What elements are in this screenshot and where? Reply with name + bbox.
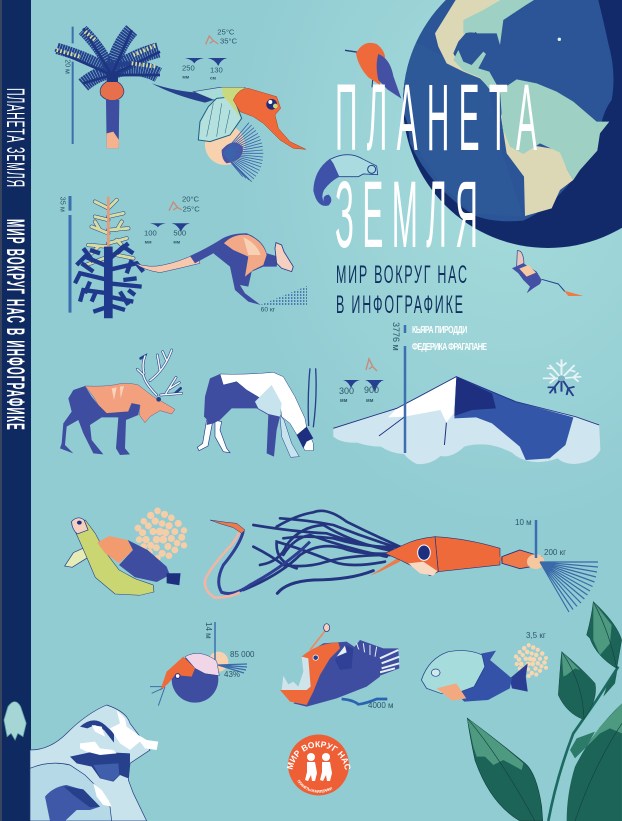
nautilus data: 43% (224, 670, 240, 679)
authors (412, 324, 487, 352)
long tail (152, 83, 213, 103)
climate data: temperature and rainfall, kangaroo (144, 195, 200, 244)
tentacles (150, 687, 165, 706)
continent: north america teal (463, 0, 537, 45)
front wave (30, 763, 112, 821)
araucaria tree with height scale: 35 м (59, 197, 68, 212)
tail (167, 573, 181, 585)
antlers (137, 350, 182, 395)
subtitle (336, 261, 467, 319)
squid size data: 10 м (515, 518, 532, 527)
depth wave (342, 699, 387, 704)
radial tail fan (223, 123, 263, 182)
icon: snowflake (543, 359, 581, 396)
spine title: ПЛАНЕТА ЗЕМЛЯ (0, 88, 28, 187)
piranha (421, 651, 528, 702)
foam (80, 710, 158, 755)
side fin (335, 645, 353, 670)
eye (313, 655, 318, 660)
eye (418, 545, 430, 560)
continent: south america teal (500, 79, 609, 180)
bottom tentacle (277, 571, 373, 593)
araucaria tree with height scale (59, 196, 143, 318)
body blue (190, 233, 278, 305)
belly peach (436, 683, 466, 701)
dark slope (454, 377, 496, 416)
climate data: mountain: мм (366, 398, 374, 404)
belly light (255, 385, 282, 417)
climate data: temperature and rainfall, rainforest: 35°C (220, 37, 238, 46)
authors: КЬЯРА ПИРОДДИ (412, 324, 467, 335)
peach circle (208, 652, 228, 672)
continent: central america teal (454, 50, 497, 89)
climate data: mountain (339, 359, 384, 404)
squid size data: 200 кг (544, 548, 566, 557)
icon: chameleon (313, 155, 378, 206)
subtitle: МИР ВОКРУГ НАС (336, 261, 467, 289)
orange head (160, 657, 195, 691)
climate data: temperature and rainfall, kangaroo: 20°C (182, 195, 200, 204)
front leg light (280, 415, 299, 457)
kangaroo (135, 233, 293, 314)
eye (175, 674, 180, 678)
pink shell top (185, 653, 219, 676)
tentacle tip (210, 520, 245, 533)
palm tree with height scale (55, 27, 160, 148)
front foam (93, 783, 112, 807)
body orange (280, 642, 340, 705)
authors: ФЕДЕРИКА ФРАГАПАНЕ (412, 341, 487, 352)
climate data: temperature and rainfall, rainforest: 250 (182, 64, 195, 73)
climate data: temperature and rainfall, kangaroo: 500 (173, 228, 186, 237)
orange head and body (233, 88, 306, 149)
globe (400, 0, 622, 248)
spine subtitle: МИР ВОКРУГ НАС В ИНФОГРАФИКЕ (0, 219, 28, 430)
anglerfish depth label: 4000 м (368, 701, 394, 710)
climate data: temperature and rainfall, rainforest: 130 (210, 66, 223, 75)
mountain (333, 377, 600, 464)
ocean (400, 0, 614, 221)
wave (30, 705, 158, 821)
tail (510, 663, 528, 692)
logo badge: ПЛАНЕТЫ И МАТЕРИКИ (297, 780, 332, 793)
reindeer (60, 350, 182, 455)
head (385, 537, 438, 576)
middle leaf (558, 652, 596, 719)
title (335, 64, 537, 267)
height scale bar (70, 27, 76, 144)
turtle (65, 518, 181, 595)
turtle eggs (135, 508, 187, 561)
head (421, 651, 485, 693)
tail fin (353, 640, 399, 676)
stem (548, 667, 618, 821)
anglerfish (280, 624, 399, 707)
upper branches (86, 200, 133, 265)
kangaroo: 60 кг (261, 307, 276, 314)
top leaf (587, 602, 622, 668)
back wave (30, 705, 150, 821)
wing (198, 97, 242, 142)
head (275, 243, 293, 272)
mid blue slope (454, 377, 573, 460)
piranha eggs (514, 644, 548, 678)
climate data: temperature and rainfall, rainforest: мм (182, 75, 190, 80)
piranha weight label: 3,5 кг (526, 631, 546, 640)
west ocean lighter (403, 42, 416, 124)
squid fin (476, 543, 544, 569)
right leaf (567, 703, 622, 821)
fruit head (100, 82, 124, 101)
shell orange (97, 536, 133, 563)
lure (310, 631, 325, 650)
side small leaf (570, 732, 595, 758)
long tentacle navy (219, 531, 310, 593)
hummingbird (152, 83, 306, 182)
climate data: temperature and rainfall, kangaroo: 25°C (183, 205, 200, 214)
fronds (57, 30, 158, 85)
oryx (197, 368, 316, 457)
snow lower (333, 377, 600, 464)
body blue (60, 386, 140, 455)
continent: north america cream (435, 0, 503, 89)
mountain height scale (391, 322, 405, 453)
flipper (65, 547, 88, 567)
squid size data (515, 518, 598, 612)
nautilus (150, 652, 228, 706)
head (71, 518, 88, 534)
climate data: temperature and rainfall, rainforest: 25°C (217, 28, 235, 37)
lower branches (95, 247, 121, 318)
peach circle (205, 125, 245, 165)
palm tree with height scale: 20 м (63, 59, 70, 74)
body blue (456, 651, 512, 702)
plant leaves (467, 602, 622, 821)
trunk (106, 100, 119, 148)
mountain height scale: 3776 м (391, 322, 401, 351)
title line one: ПЛАНЕТА (335, 64, 537, 170)
snow cap (388, 377, 456, 423)
crest navy (80, 720, 114, 743)
body blue (293, 642, 380, 707)
panel: book spine (0, 0, 31, 821)
mantle (435, 537, 500, 572)
climate data: mountain: 300 (339, 386, 354, 396)
shell blue (119, 540, 170, 582)
ridge lines (333, 377, 599, 445)
arm orange (370, 557, 400, 576)
tentacles (243, 511, 400, 590)
icon: small orange bird (345, 43, 401, 99)
climate data: temperature and rainfall, rainforest (182, 28, 238, 80)
climate data: temperature and rainfall, kangaroo: мм (173, 239, 181, 244)
body peach (224, 235, 267, 277)
climate data: mountain: мм (340, 398, 348, 404)
eye (266, 99, 277, 110)
continent: south america cream (499, 90, 573, 216)
nautilus data (204, 622, 255, 679)
bottom leaf (467, 718, 543, 821)
icon: tardigrade (4, 702, 26, 740)
climate data: temperature and rainfall, kangaroo: мм (145, 239, 152, 244)
title line two: ЗЕМЛЯ (335, 161, 478, 267)
climate data: temperature and rainfall, kangaroo: 100 (144, 228, 157, 237)
front wave navy (45, 785, 100, 821)
climate data: mountain: 900 (364, 385, 379, 395)
shell (172, 656, 218, 703)
body orange (85, 383, 175, 423)
hind legs (197, 420, 230, 453)
long tentacle pink (205, 528, 240, 598)
neck and belly (75, 520, 154, 595)
head mask (297, 427, 313, 448)
logo badge (286, 734, 350, 796)
subtitle: В ИНФОГРАФИКЕ (336, 291, 463, 319)
middle navy (70, 752, 130, 782)
horns (308, 368, 316, 427)
body blue (204, 374, 280, 457)
trough stripes (93, 763, 119, 781)
height scale bar (65, 196, 74, 313)
giant squid (205, 511, 500, 598)
stem leaf (603, 670, 617, 697)
nautilus data: 85 000 (230, 650, 255, 659)
icon: running children (305, 753, 332, 781)
island (558, 38, 561, 41)
kangaroo weight fan (260, 286, 307, 306)
badge text: МИР ВОКРУГ НАС (286, 741, 350, 770)
icon: jerboa (512, 251, 583, 296)
tail (135, 253, 200, 273)
climate data: temperature and rainfall, rainforest: см (210, 75, 217, 80)
body white (220, 372, 313, 451)
nautilus data: 14 м (204, 622, 213, 639)
mouth (282, 657, 311, 690)
